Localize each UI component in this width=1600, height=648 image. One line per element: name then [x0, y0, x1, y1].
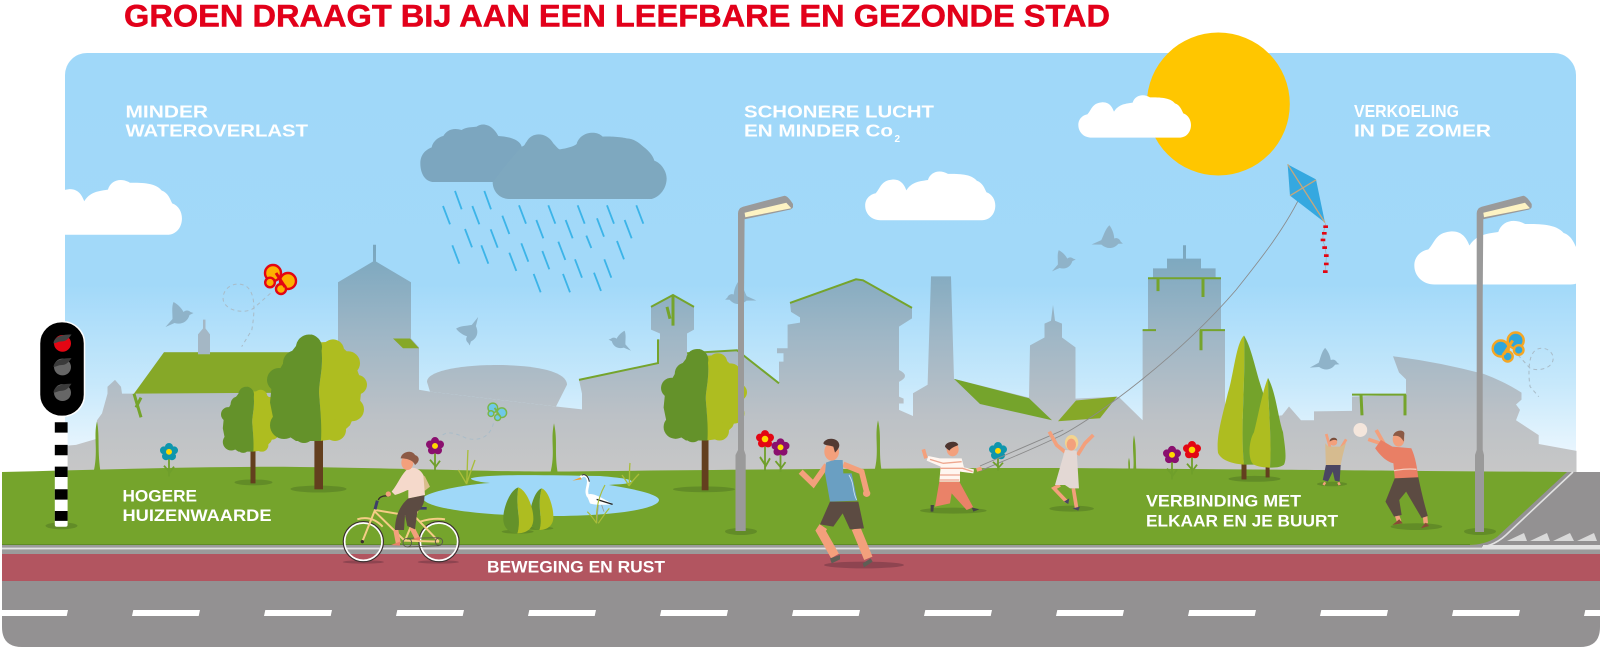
- bush shadows: [502, 527, 553, 534]
- man: [1368, 430, 1429, 528]
- label: verkoeling: [1354, 101, 1491, 141]
- butterfly trails: [223, 284, 1553, 439]
- bike path: [2, 554, 1600, 581]
- flowers: [160, 430, 1201, 479]
- sidewalk: [2, 544, 1600, 554]
- heron: [572, 475, 613, 523]
- conifers: [1218, 335, 1286, 482]
- green roof: church: [134, 352, 300, 394]
- cyclist wheel shadows: [343, 560, 459, 564]
- kite string at hand: [980, 430, 1063, 466]
- green roof lines and vines: [134, 278, 1406, 417]
- cypress shapes: [93, 420, 1137, 476]
- label: minder wateroverlast: MINDER: [126, 102, 208, 122]
- green roof: factory 2: [1058, 397, 1117, 421]
- girl: [1049, 432, 1093, 511]
- kite tail: [1323, 223, 1326, 272]
- kite string lower: [980, 290, 1236, 471]
- red lamp: [54, 335, 71, 352]
- label: minder wateroverlast: [126, 102, 308, 141]
- label: verkoeling: VERKOELING: [1354, 101, 1459, 121]
- boy shadow: [920, 508, 987, 514]
- sky panel: [65, 53, 1576, 478]
- kite string: [1236, 190, 1303, 290]
- rain clouds: [420, 124, 667, 199]
- toddler shadow: [1317, 482, 1347, 486]
- rain drops: [443, 191, 643, 292]
- cypress, bushes, heron, cyclist: [343, 450, 613, 564]
- grass tuft: [458, 450, 475, 484]
- bush right: [530, 488, 553, 530]
- bicycle: [344, 496, 458, 561]
- label: hogere huizenwaarde: [122, 487, 272, 525]
- runner, boy, girl: [801, 430, 1094, 568]
- runner: [801, 439, 873, 567]
- pond: [423, 475, 659, 516]
- label: hogere huizenwaarde: HUIZENWAARDE: [122, 506, 272, 525]
- label: schonere lucht: [744, 101, 934, 145]
- label: verbinding: [1146, 492, 1339, 531]
- traffic light: [40, 322, 84, 529]
- grass tuft right of pond: [622, 463, 639, 486]
- kite: [1236, 164, 1329, 290]
- cyclist person: [386, 452, 430, 546]
- tree 3 trunk: [702, 437, 708, 490]
- pole: [55, 422, 68, 527]
- cloud: right: [1414, 221, 1588, 284]
- girl shadow: [1049, 506, 1094, 512]
- church spire: [198, 320, 210, 354]
- birds: [166, 222, 1343, 377]
- tree 1 shadow: [234, 479, 272, 485]
- skyline: [64, 245, 1576, 476]
- cloud: upper left: [39, 180, 182, 235]
- rain cloud right: [493, 133, 667, 199]
- lamp post 1: [725, 196, 793, 535]
- butterfly: red: [265, 265, 296, 294]
- tree 3 shadow: [673, 486, 735, 492]
- tree 1 crown: [221, 387, 281, 453]
- runner shadow: [824, 562, 904, 568]
- boy: [923, 442, 982, 512]
- label: beweging en rust: BEWEGING EN RUST: [487, 559, 665, 577]
- label: schonere lucht: 2: [894, 134, 900, 145]
- toddler: [1323, 434, 1346, 485]
- road dashes: [2, 610, 1600, 616]
- butterfly: blue: [1493, 332, 1524, 362]
- cloud in front of sun: [1078, 95, 1191, 138]
- pole shadow: [46, 522, 78, 529]
- label: minder wateroverlast: WATEROVERLAST: [126, 121, 308, 141]
- tree 2 trunk: [314, 437, 323, 489]
- butterfly: green: [488, 403, 507, 420]
- label: hogere huizenwaarde: HOGERE: [122, 487, 197, 506]
- green lamp: [54, 384, 71, 401]
- road: [2, 581, 1600, 647]
- dome: [427, 365, 567, 406]
- bush left: [503, 487, 533, 533]
- rain cloud left: [420, 124, 522, 182]
- curb line: [1470, 472, 1573, 549]
- tree 2 crown: [267, 334, 367, 443]
- tree 2 shadow: [290, 486, 346, 492]
- label: schonere lucht: EN MINDER Co: [744, 121, 893, 141]
- ground: [2, 467, 1567, 545]
- right road wedge: [1450, 472, 1600, 554]
- sun: [1147, 32, 1290, 176]
- amber lamp: [54, 359, 71, 375]
- trees: [160, 334, 1286, 492]
- city silhouette: [64, 245, 1576, 476]
- man shadow: [1391, 523, 1442, 530]
- cloud: centre: [865, 171, 995, 220]
- lamp post 2: [1464, 196, 1532, 535]
- shark teeth road markings: [1507, 533, 1597, 541]
- label: schonere lucht: SCHONERE LUCHT: [744, 101, 934, 121]
- green roof: factory 1: [954, 379, 1052, 420]
- label: verbinding: ELKAAR EN JE BUURT: [1146, 512, 1339, 531]
- label: verkoeling: IN DE ZOMER: [1354, 121, 1491, 141]
- ball: [1353, 423, 1367, 437]
- ball, toddler, man: [1317, 423, 1442, 530]
- tree 1 trunk: [250, 449, 256, 483]
- signal housing: [40, 322, 84, 416]
- kite body: [1288, 164, 1325, 223]
- label: verbinding: VERBINDING MET: [1146, 492, 1302, 511]
- tree 3 crown: [661, 349, 747, 442]
- green ledge tower: [393, 338, 419, 348]
